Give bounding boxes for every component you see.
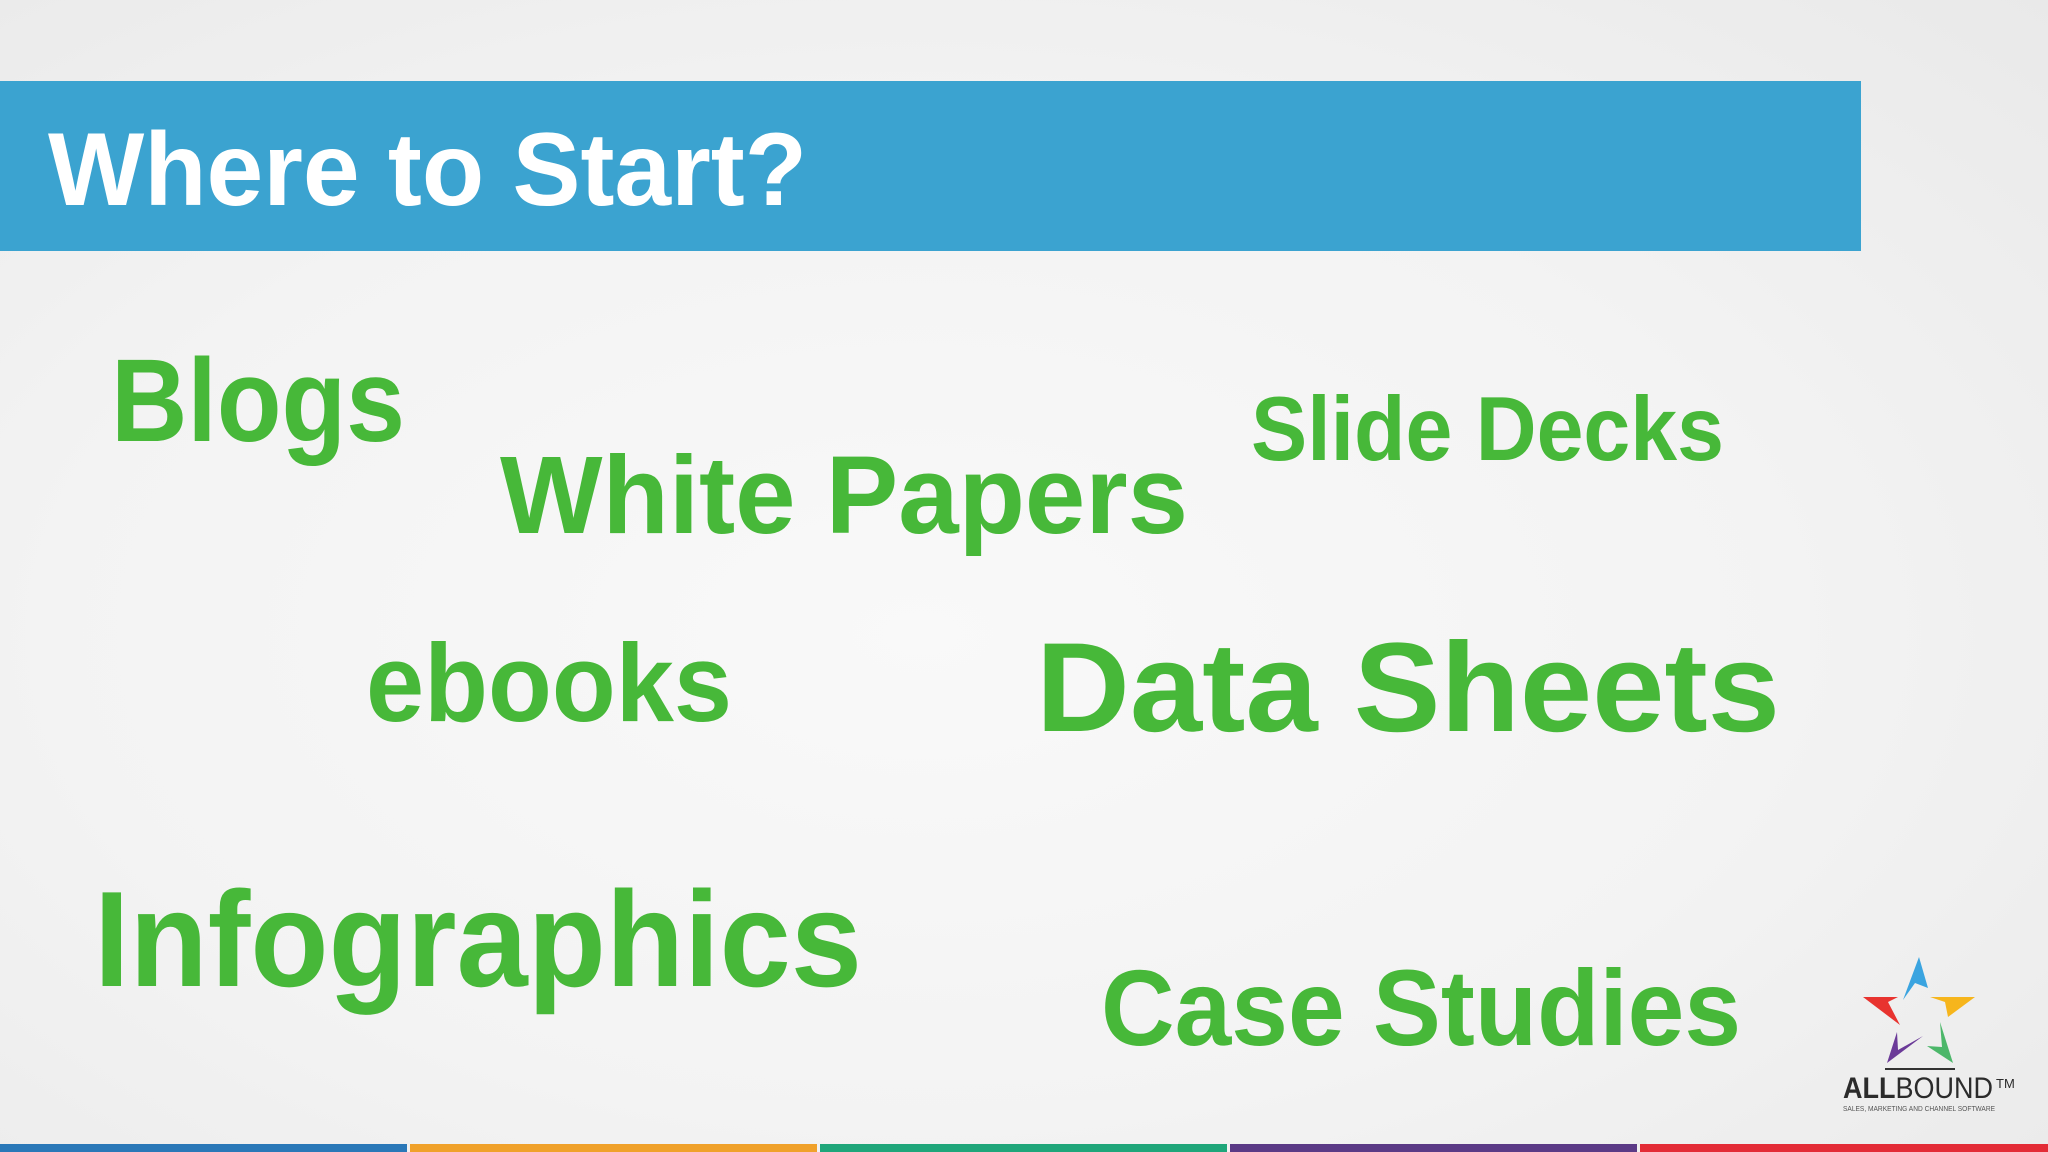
word: ebooks: ebooks <box>366 622 732 745</box>
logo: AllBound: TM <box>1996 1076 2015 1091</box>
word: Infographics: Infographics <box>94 863 862 1015</box>
bottom color bar <box>0 1144 2048 1152</box>
icon: star arrows <box>1863 957 1975 1069</box>
title banner <box>0 81 1861 251</box>
title: Where to Start? <box>48 112 807 228</box>
word: Case Studies: Case Studies <box>1101 947 1741 1068</box>
word: Data Sheets: Data Sheets <box>1036 616 1780 758</box>
word: Blogs: Blogs <box>111 335 405 467</box>
tagline: SALES, MARKETING AND CHANNEL SOFTWARE <box>1843 1104 1995 1113</box>
logo wordmark: ALLBOUND <box>1843 1072 1993 1105</box>
word: White Papers: White Papers <box>500 434 1188 557</box>
word: Slide Decks: Slide Decks <box>1251 379 1724 480</box>
logo: AllBound <box>1843 957 2015 1113</box>
